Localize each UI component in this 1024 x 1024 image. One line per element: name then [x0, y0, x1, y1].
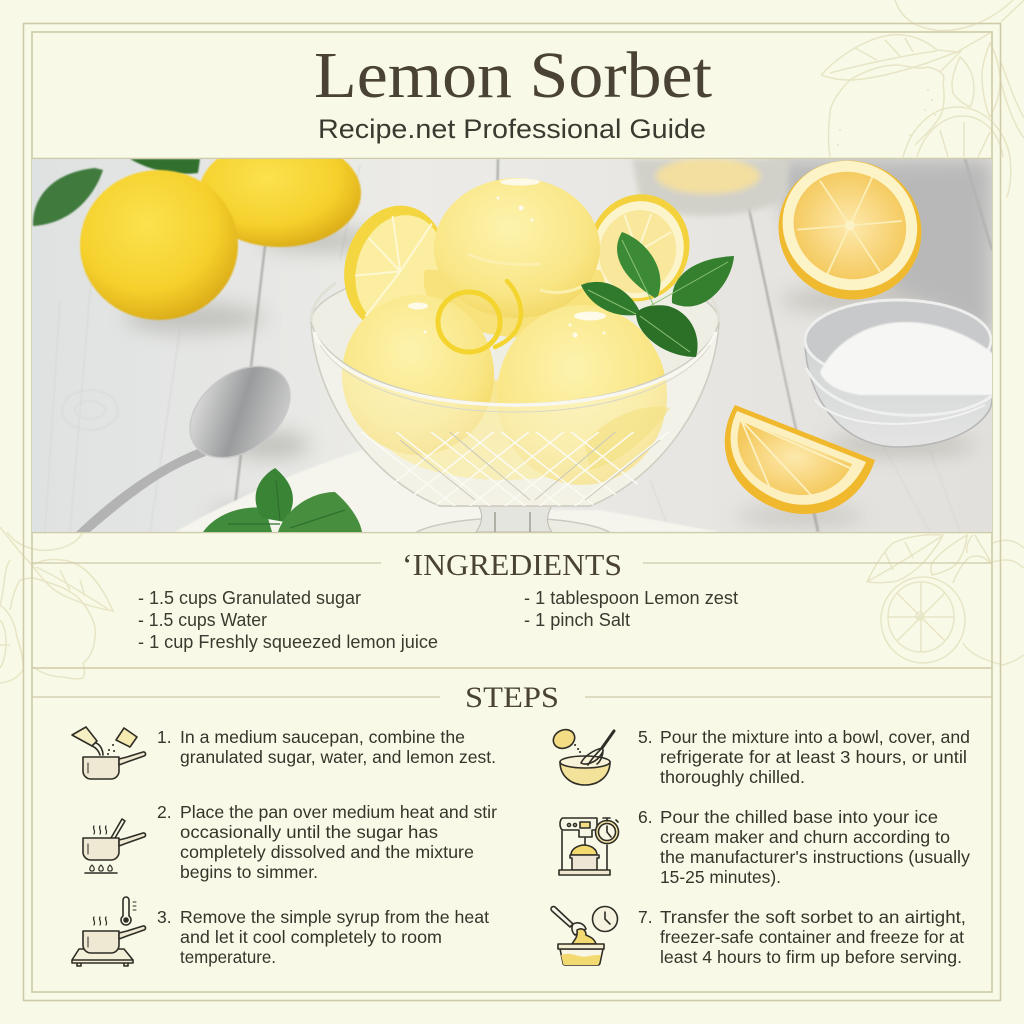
- step 5 text: thoroughly chilled.: [660, 767, 805, 787]
- step 3 text: and let it cool completely to room: [180, 927, 442, 947]
- step 6 text: [638, 807, 970, 887]
- botanical decoration: top right: [821, 0, 1024, 197]
- step 3 text: temperature.: [180, 947, 276, 967]
- bottom mint: [203, 468, 362, 532]
- icon: pour into saucepan: [72, 727, 146, 779]
- botanical decoration: bottom left: [0, 527, 113, 683]
- step 5 text: refrigerate for at least 3 hours, or until: [660, 747, 967, 767]
- cut-crystal lattice: [361, 432, 670, 506]
- title: Lemon Sorbet: [314, 39, 712, 112]
- ingredients list: right column: - 1 pinch Salt: [524, 610, 630, 630]
- mint sprig: [581, 232, 734, 357]
- step 7 text: Transfer the soft sorbet to an airtight,: [660, 907, 966, 927]
- step 6 text: 6.: [638, 807, 653, 827]
- icon: transfer to container and freeze: [551, 906, 618, 965]
- ingredients list: left column: [138, 588, 438, 652]
- sugar specks: [408, 178, 606, 338]
- step 6 text: 15-25 minutes).: [660, 867, 781, 887]
- icon: whisking in bowl: [550, 726, 614, 785]
- step 1 text: In a medium saucepan, combine the: [180, 727, 465, 747]
- lemon half: [778, 160, 922, 300]
- top-left leaf: [33, 159, 200, 226]
- botanical decoration: bottom right: [867, 535, 1024, 665]
- step 3 text: [157, 907, 489, 967]
- left scoop: [342, 295, 494, 455]
- glass stem: [416, 506, 610, 532]
- blurred glass at top: [632, 158, 790, 216]
- step 1 text: granulated sugar, water, and lemon zest.: [180, 747, 496, 767]
- sugar bowl: [805, 300, 1000, 447]
- step 6 text: Pour the chilled base into your ice: [660, 807, 938, 827]
- ingredients list: right column: [524, 588, 738, 630]
- step 3 text: Remove the simple syrup from the heat: [180, 907, 489, 927]
- napkin: [175, 450, 720, 532]
- step 5 text: Pour the mixture into a bowl, cover, and: [660, 727, 970, 747]
- ingredients list: left column: - 1.5 cups Water: [138, 610, 267, 630]
- step 2 text: [157, 802, 497, 882]
- back lemon: [200, 159, 362, 248]
- hero photo: lemon sorbet in glass bowl: [32, 159, 992, 532]
- step 2 text: Place the pan over medium heat and stir: [180, 802, 497, 822]
- icon: ice cream maker with timer: [559, 818, 618, 875]
- step 7 text: [638, 907, 966, 967]
- step 7 text: 7.: [638, 907, 653, 927]
- step 3 text: 3.: [157, 907, 172, 927]
- lemon slice behind right: [595, 194, 690, 302]
- step 6 text: cream maker and churn according to: [660, 827, 950, 847]
- step 2 text: occasionally until the sugar has: [180, 822, 438, 842]
- ingredients list: left column: - 1 cup Freshly squeezed lemon juice: [138, 632, 438, 652]
- soft shadows: [125, 228, 975, 525]
- step 2 text: 2.: [157, 802, 172, 822]
- step 7 text: freezer-safe container and freeze for at: [660, 927, 964, 947]
- top scoop: [424, 178, 605, 337]
- right scoop: [497, 305, 667, 485]
- bowl back: [311, 262, 719, 506]
- wood plank seams and grain: [45, 159, 992, 532]
- bowl glass front: [311, 283, 719, 510]
- ingredients heading: ‘INGREDIENTS: [402, 547, 622, 582]
- blurred top-right plank shade: [770, 159, 992, 340]
- icon: cooling saucepan with thermometer: [72, 897, 146, 966]
- step 5 text: 5.: [638, 727, 653, 747]
- step 1 text: 1.: [157, 727, 172, 747]
- melted sorbet pool: [390, 380, 547, 480]
- icon: saucepan on burner: [83, 819, 146, 873]
- step 2 text: begins to simmer.: [180, 862, 318, 882]
- step 5 text: [638, 727, 970, 787]
- ingredients list: left column: - 1.5 cups Granulated sugar: [138, 588, 361, 608]
- step 6 text: the manufacturer's instructions (usually: [660, 847, 970, 867]
- steps heading: STEPS: [465, 681, 559, 714]
- lemon wedge: [725, 405, 875, 514]
- lemon slice behind left: [344, 206, 438, 320]
- left lemon: [80, 170, 238, 320]
- lemon zest curl: [438, 281, 521, 352]
- ingredients list: right column: - 1 tablespoon Lemon zest: [524, 588, 738, 608]
- step 1 text: [157, 727, 496, 767]
- subtitle: Recipe.net Professional Guide: [318, 114, 706, 144]
- step 2 text: completely dissolved and the mixture: [180, 842, 474, 862]
- step 7 text: least 4 hours to firm up before serving.: [660, 947, 962, 967]
- spoon: [76, 366, 291, 532]
